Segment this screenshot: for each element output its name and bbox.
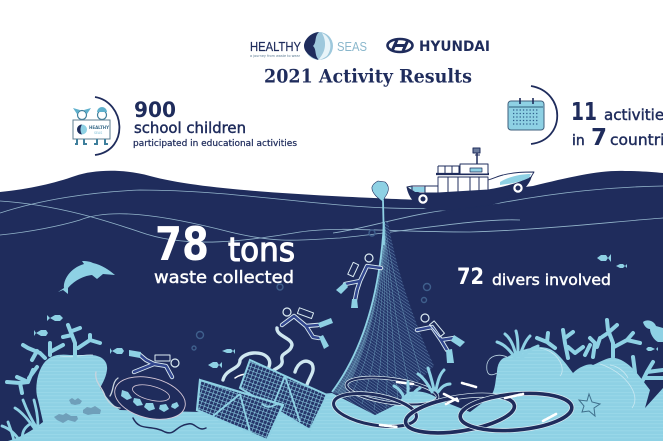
crab trap: front bbox=[197, 380, 283, 440]
stat: waste collected: waste collected bbox=[154, 268, 294, 288]
sea turtle bbox=[643, 320, 663, 342]
stat: waste collected bbox=[154, 217, 295, 288]
logo: Hyundai bbox=[388, 39, 490, 55]
starfish bbox=[579, 394, 600, 416]
seaweed: left bbox=[2, 400, 38, 441]
stat: waste collected: 78 bbox=[155, 217, 209, 271]
stat: school children: 900 bbox=[134, 98, 176, 122]
coral: right bbox=[537, 320, 663, 382]
stat: divers involved: divers involved bbox=[492, 271, 611, 289]
stat: divers involved bbox=[457, 265, 611, 290]
icon: calendar bbox=[508, 86, 557, 144]
logo: Healthy Seas: SEAS bbox=[337, 39, 367, 54]
stat: divers involved: 72 bbox=[457, 265, 484, 290]
logo: Healthy Seas bbox=[250, 32, 367, 60]
stat: waste collected: tons bbox=[228, 230, 295, 269]
stat: school children bbox=[133, 98, 297, 149]
stat: activities and countries: in bbox=[572, 133, 585, 149]
seabed bbox=[8, 347, 663, 441]
logo: Hyundai: HYUNDAI bbox=[419, 39, 490, 55]
stat: school children: participated in educational activities bbox=[133, 139, 297, 149]
mound outlines bbox=[60, 348, 635, 408]
bubbles bbox=[192, 230, 430, 350]
icon: children holding sign: SEAS bbox=[94, 131, 102, 135]
stat: activities and countries: 11 bbox=[571, 97, 597, 126]
logo: Healthy Seas: a journey from waste to wear bbox=[250, 54, 301, 58]
lost nets and ropes bbox=[96, 328, 313, 433]
tire with nets: left bbox=[110, 370, 190, 426]
stat: school children: school children bbox=[134, 119, 246, 137]
coral: left bbox=[7, 325, 100, 393]
wave lines bbox=[0, 186, 663, 242]
logo: Healthy Seas: HEALTHY bbox=[250, 39, 301, 54]
icon: children holding sign bbox=[73, 97, 119, 155]
diver: near net bbox=[336, 254, 381, 308]
dolphin bbox=[58, 261, 115, 294]
tires: right bbox=[331, 373, 573, 439]
net bbox=[332, 222, 434, 415]
fish bbox=[34, 254, 658, 368]
stat: activities and countries: 7 bbox=[591, 125, 607, 151]
title: 2021 Activity Results bbox=[264, 66, 472, 88]
diver: over tire bbox=[129, 350, 179, 377]
sea background bbox=[0, 171, 663, 441]
icon: children holding sign: HEALTHY bbox=[89, 125, 109, 130]
diver: right of net bbox=[417, 314, 465, 363]
boat bbox=[407, 148, 534, 210]
crab clusters bbox=[54, 398, 101, 423]
buoy and rope bbox=[372, 181, 388, 245]
seaweed: on net bbox=[394, 368, 450, 398]
diver: above traps bbox=[282, 308, 333, 349]
crab trap: back bbox=[240, 360, 327, 430]
stat: activities and countries bbox=[571, 97, 663, 151]
seaweed: top of right mound bbox=[497, 331, 538, 358]
